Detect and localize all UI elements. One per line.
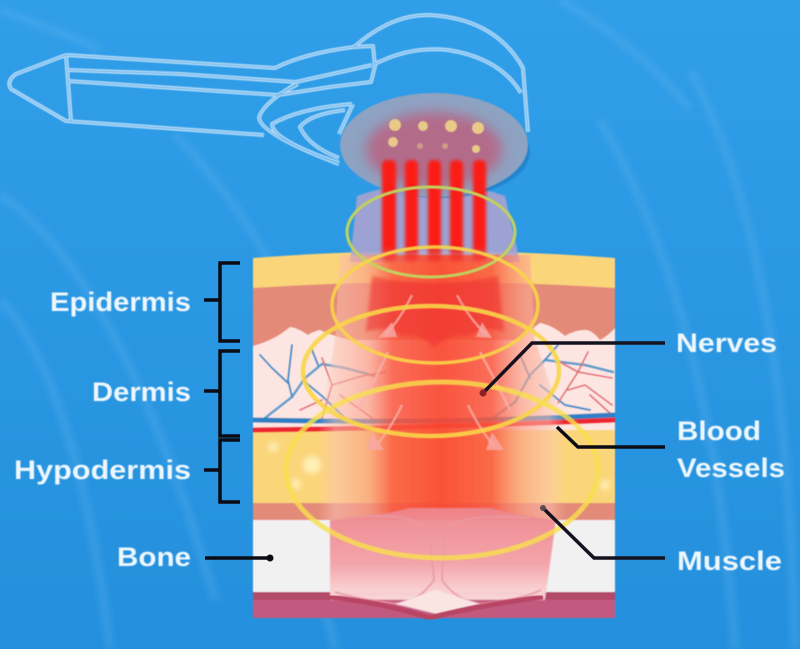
fat cells bbox=[268, 442, 610, 490]
arrows through tissue bbox=[358, 295, 510, 447]
ring 3 bbox=[303, 306, 559, 436]
ring 1 bbox=[347, 187, 515, 277]
panel: skin cross-section bbox=[253, 251, 615, 618]
LED lights bbox=[388, 119, 484, 153]
lavender column bbox=[350, 183, 520, 262]
icon: device treatment disc bbox=[340, 93, 530, 198]
leader: blood vessels bbox=[557, 427, 665, 447]
bracket: epidermis bbox=[204, 263, 240, 341]
layer: epidermis yellow bbox=[253, 251, 615, 288]
arrowheads bbox=[366, 322, 504, 450]
light beams through the skin bbox=[318, 183, 566, 618]
label: Blood Vessels: Vessels bbox=[677, 453, 785, 483]
layer: epidermis salmon bbox=[253, 282, 615, 346]
label: Dermis: Dermis bbox=[92, 377, 191, 407]
bracket: hypodermis bbox=[204, 440, 240, 502]
ring 4 bbox=[286, 382, 598, 558]
muscle underside curve bbox=[328, 597, 543, 618]
bracket: dermis bbox=[204, 351, 240, 436]
red energy beams bbox=[382, 160, 486, 262]
vessels: blue network bbox=[260, 345, 613, 420]
label: Blood Vessels bbox=[677, 416, 785, 483]
icon: handheld laser device outline bbox=[9, 15, 528, 164]
central beam column bbox=[318, 255, 566, 520]
vessel: main blue bbox=[253, 415, 615, 421]
muscle stripe bbox=[253, 592, 615, 600]
muscle pale centre bbox=[395, 590, 480, 614]
leader: muscle bbox=[540, 505, 665, 558]
label: Bone: Bone bbox=[117, 542, 191, 572]
label: Nerves: Nerves bbox=[676, 328, 777, 358]
label: Muscle: Muscle bbox=[677, 546, 782, 576]
muscle and bone beam block bbox=[330, 508, 556, 600]
label: Epidermis: Epidermis bbox=[50, 287, 191, 317]
leader: bone bbox=[205, 554, 274, 562]
layer: muscle base bbox=[253, 590, 615, 618]
layer: hypodermis fat bbox=[253, 430, 615, 503]
vessel: main red bbox=[253, 420, 615, 430]
label: Hypodermis: Hypodermis bbox=[14, 455, 191, 485]
label: Blood Vessels: Blood bbox=[677, 416, 761, 446]
deep red wave at dermal boundary bbox=[366, 276, 504, 348]
muscle lobes bbox=[335, 516, 541, 604]
vessels: red network bbox=[300, 352, 612, 420]
leader: nerves bbox=[480, 343, 665, 396]
energy ripple rings bbox=[286, 187, 598, 558]
layer: lower salmon band bbox=[253, 502, 615, 520]
layer: bone bbox=[253, 519, 615, 592]
ring 2 bbox=[332, 247, 538, 363]
layer: dermis bbox=[253, 318, 615, 430]
